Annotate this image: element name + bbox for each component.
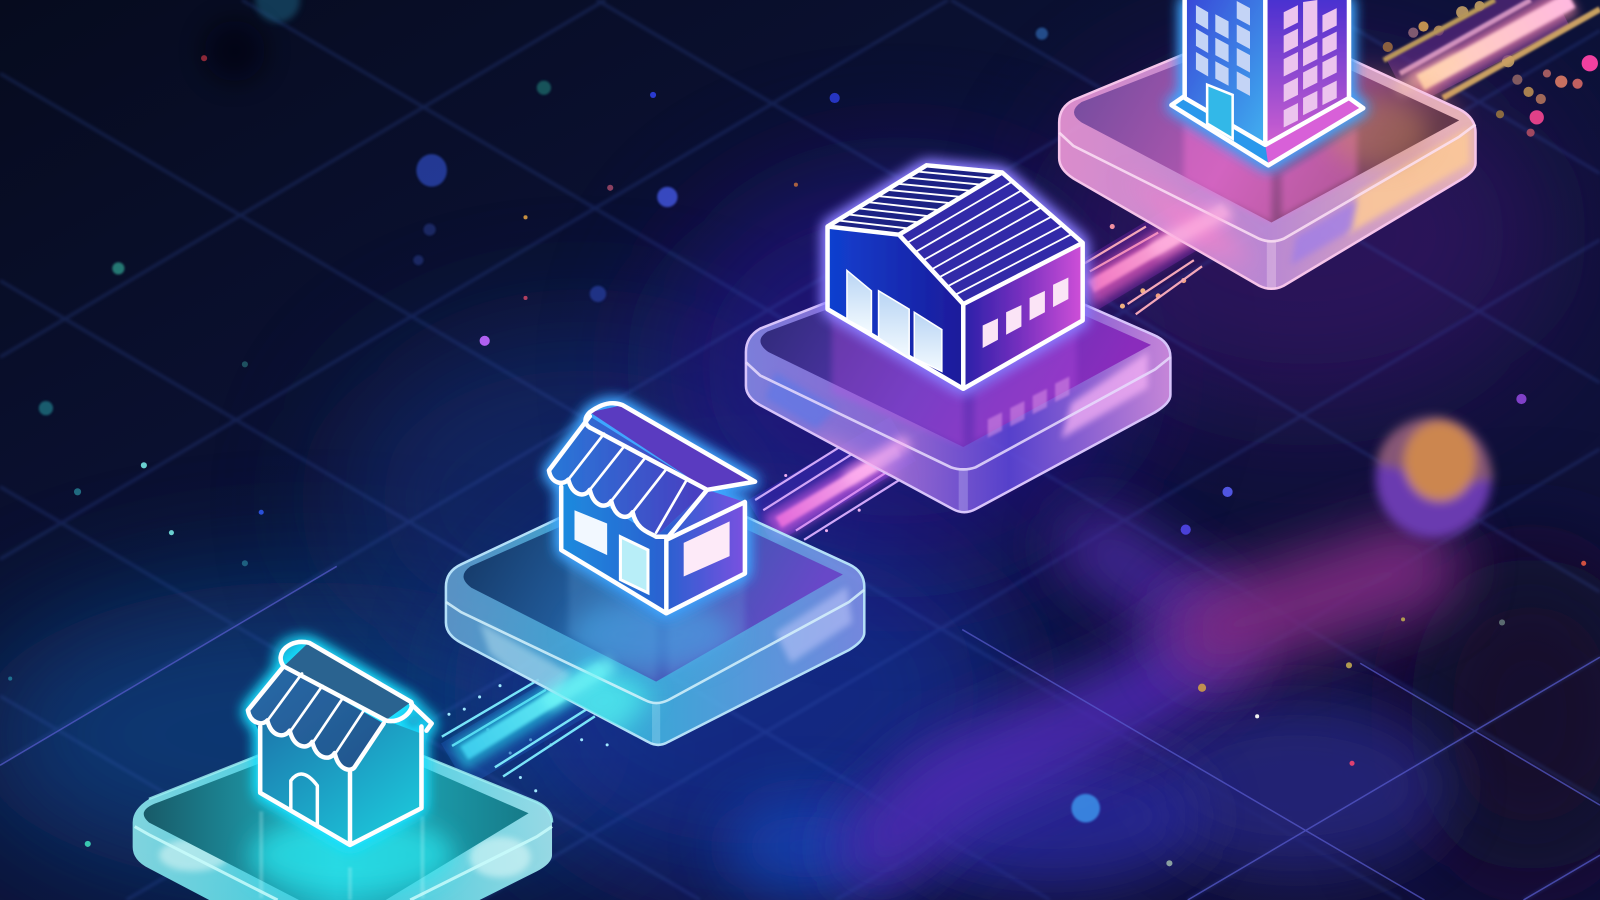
stream: warehouse to tower: [1082, 204, 1224, 314]
stream: shop to store: [442, 668, 602, 777]
bokeh lights: [39, 0, 1100, 822]
icon: office tower: [1171, 0, 1363, 165]
stream: tower outward: [1384, 0, 1600, 98]
icon: small shop: [248, 642, 432, 845]
panel: glass platform 1: [132, 754, 554, 900]
panel: glass platform 3: [744, 302, 1172, 514]
purple light trail glow: [724, 546, 1449, 898]
panel: glass platform 2: [444, 516, 866, 746]
stream: store to warehouse: [755, 439, 903, 540]
icon: warehouse: [828, 165, 1083, 389]
stream overlays on glass: [546, 57, 1459, 704]
icon: store: [549, 403, 755, 613]
crisp lower-right grid lines: [0, 566, 1600, 900]
lens flare orb: [1376, 416, 1493, 538]
panel: glass platform 4: [1058, 54, 1477, 290]
